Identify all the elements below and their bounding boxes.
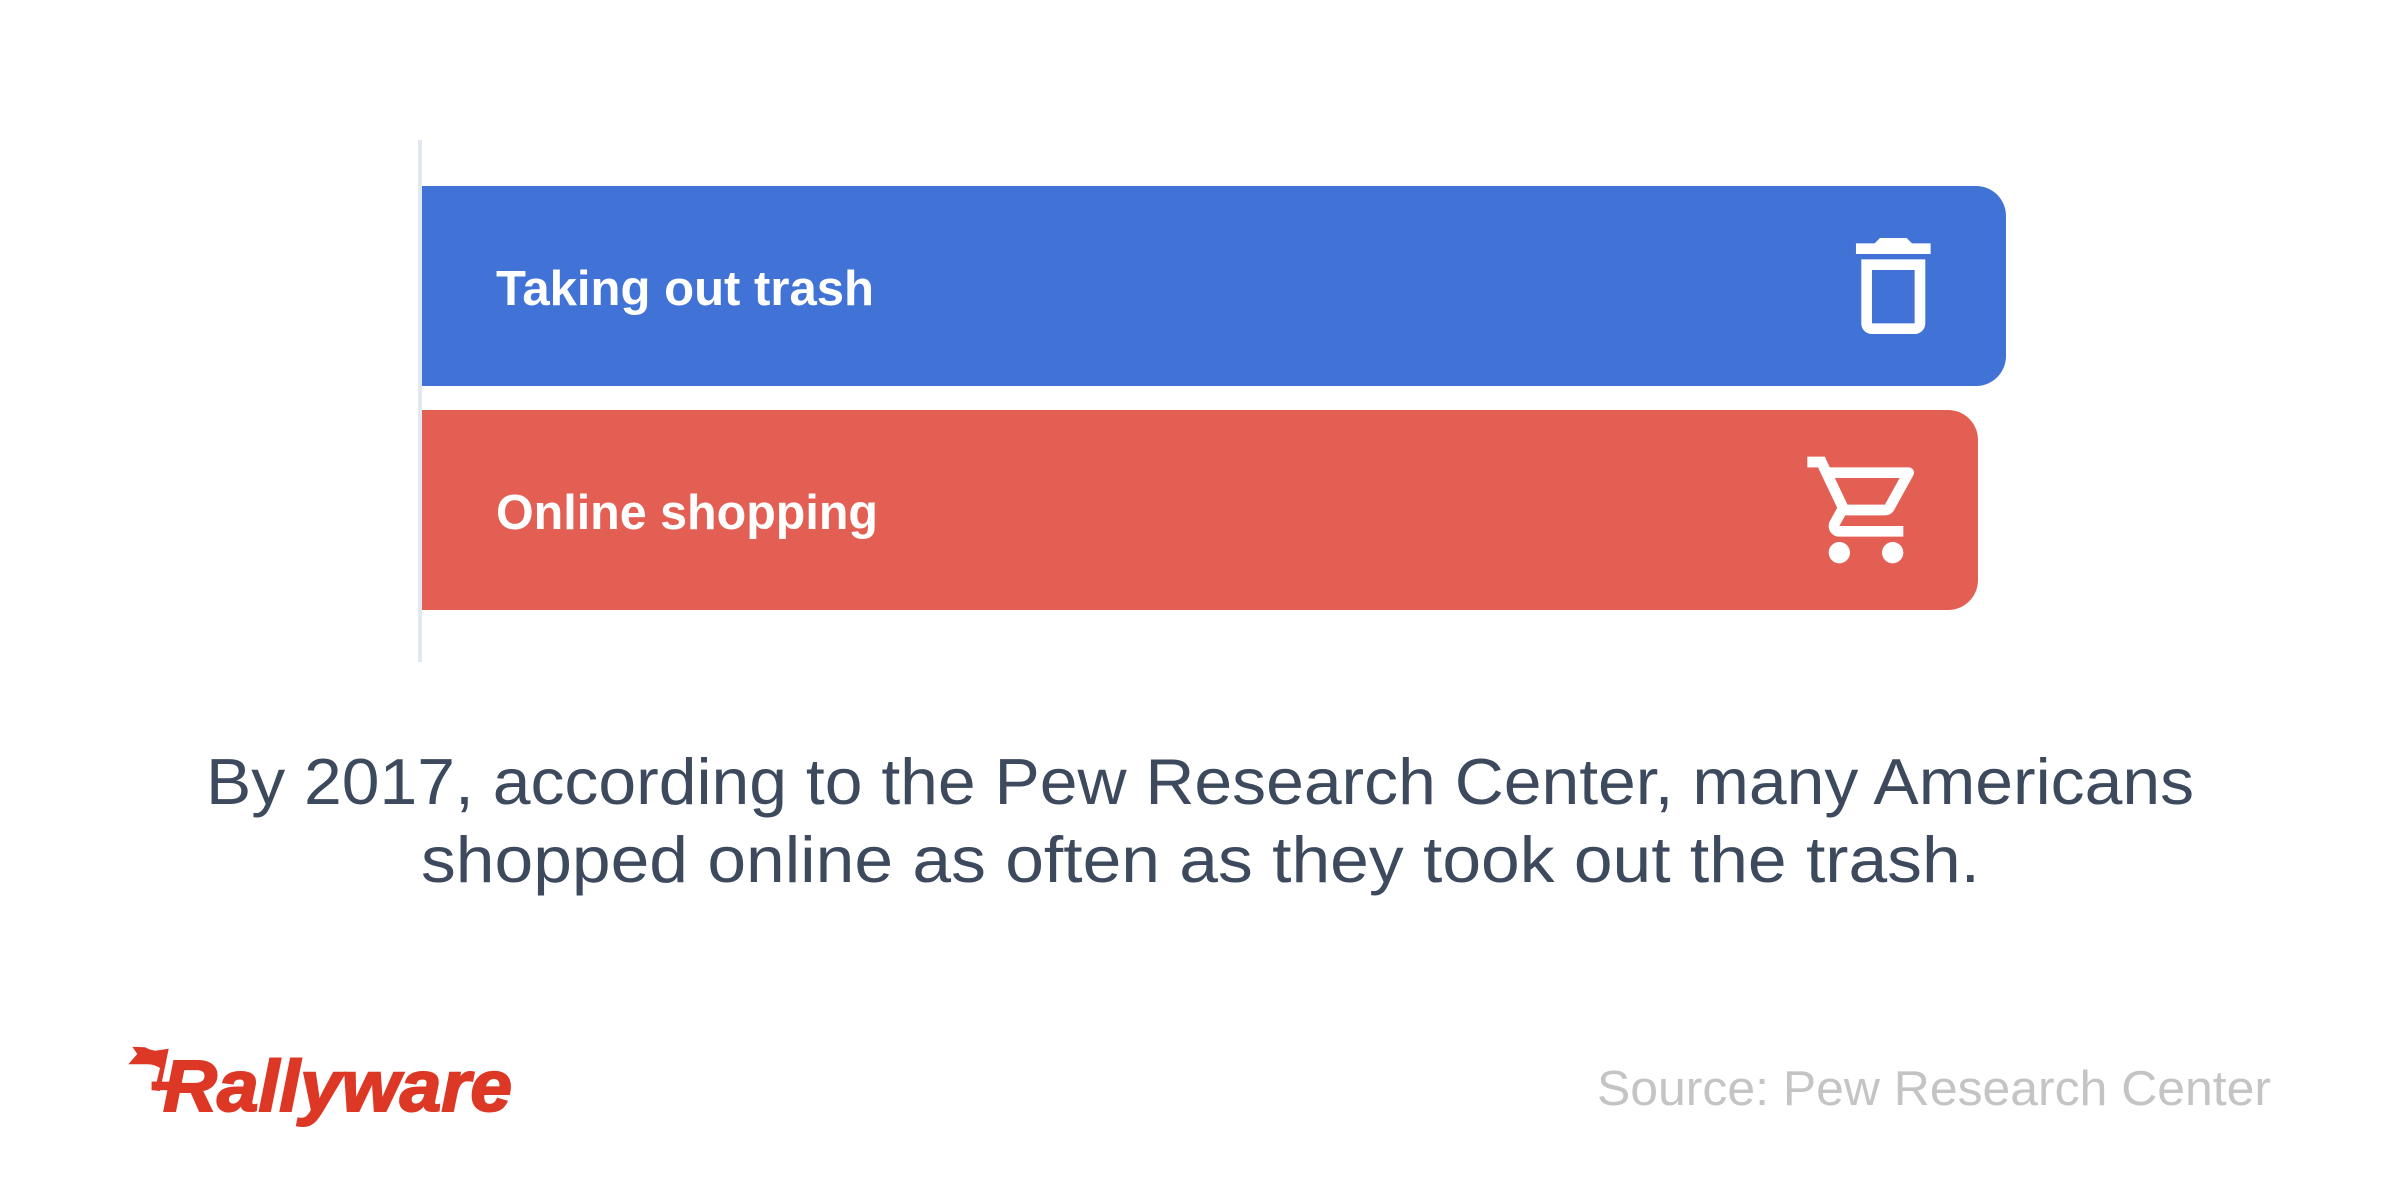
bar label: taking out trash: Taking out trash [496,262,874,316]
bar: online shopping [422,410,1978,610]
logo crossbar [152,1082,178,1090]
logo flag [128,1047,169,1091]
caption text: By 2017, according to the Pew Research Center, many Americans [206,745,2194,818]
bar chart [418,140,2006,662]
logo wordmark: Rallyware [163,1047,512,1127]
bar: taking out trash [422,186,2006,386]
logo: Rallyware [128,1047,512,1127]
icon: shopping cart [1807,457,1914,563]
bar label: online shopping: Online shopping [496,486,878,540]
caption text: shopped online as often as they took out the trash. [421,823,1980,896]
chart axis line [418,140,422,662]
source note: Source: Pew Research Center [1597,1062,2271,1116]
icon: trash can [1856,238,1931,334]
caption text [206,745,2194,896]
